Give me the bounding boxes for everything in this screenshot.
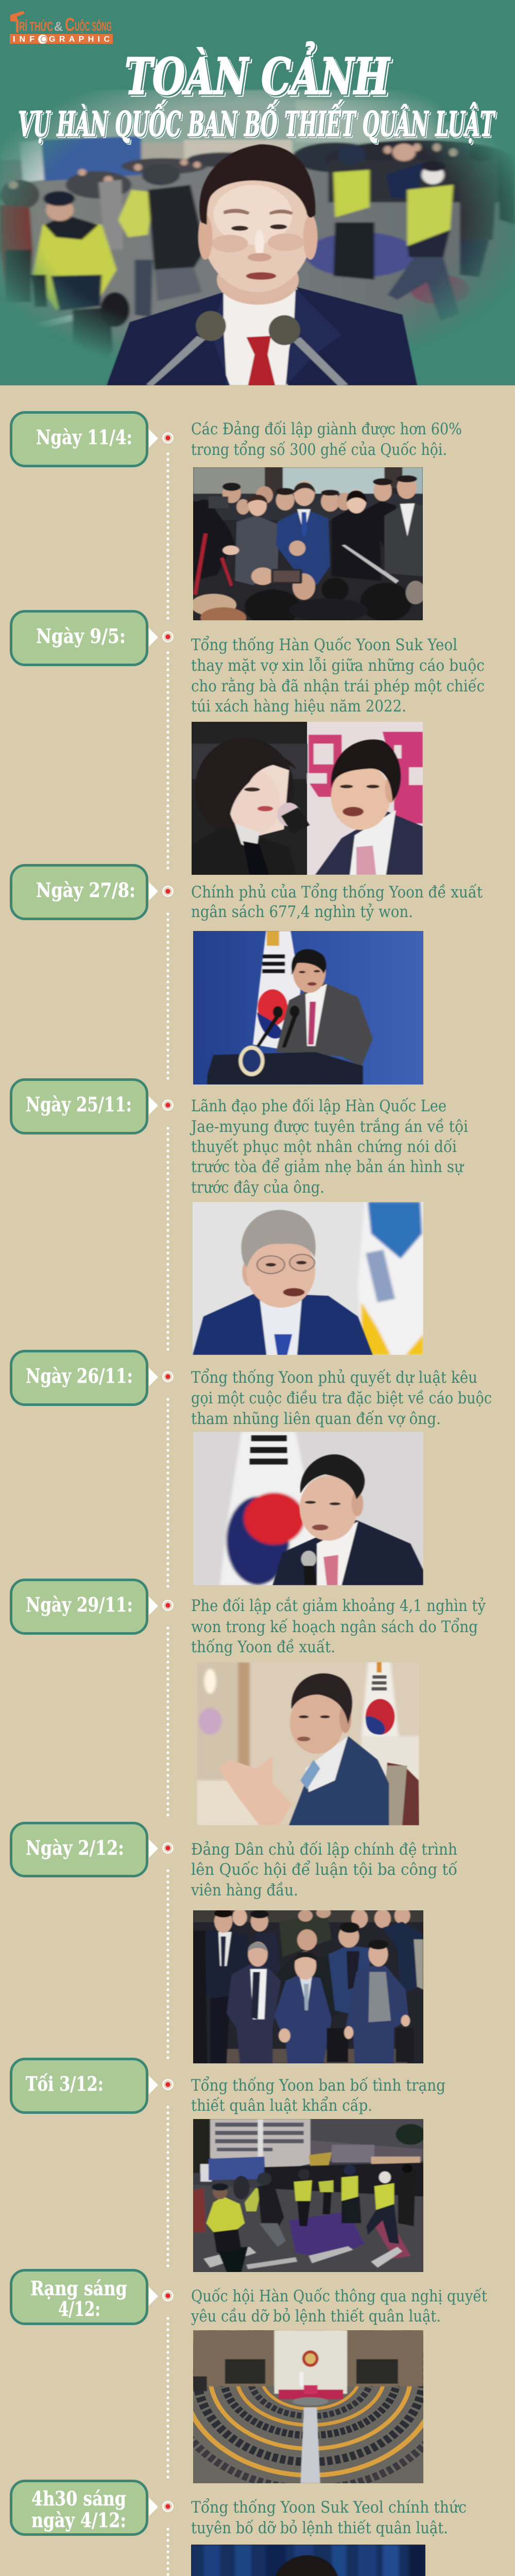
hero photo: street crowd and president: [0, 89, 515, 385]
text: Chính phủ của Tổng thống Yoon đề xuất: [191, 883, 483, 902]
text: tham nhũng liên quan đến vợ ông.: [191, 1410, 441, 1428]
marker: [149, 1096, 173, 1115]
text: Tổng thống Yoon ban bố tình trạng: [191, 2076, 445, 2095]
marker: [149, 2076, 173, 2094]
text: trước tòa để giảm nhẹ bản án hình sự: [191, 1157, 465, 1176]
title: [18, 42, 496, 144]
date pill: Ngày 2/12:: [26, 1836, 124, 1859]
text: thuyết phục một nhân chứng nói dối: [191, 1138, 457, 1156]
text: [191, 2498, 467, 2537]
connector: [166, 1128, 169, 1353]
text: [191, 2287, 487, 2326]
date pill: Rạng sáng: [30, 2277, 127, 2300]
connector: [166, 1628, 169, 1819]
timeline item: Ngày 2/12: [11, 1823, 457, 2063]
date pill: Ngày 29/11:: [26, 1593, 133, 1616]
marker: [149, 2287, 173, 2306]
text: thiết quân luật khẩn cấp.: [191, 2096, 372, 2115]
date pill: [11, 1351, 147, 1404]
marker: [149, 429, 173, 448]
text: thống Yoon đề xuất.: [191, 1638, 335, 1656]
photo: opposition lawmakers press: [193, 467, 423, 620]
date pill: Ngày 27/8:: [36, 878, 135, 902]
timeline item: Ngày 26/11: [11, 1351, 492, 1590]
timeline item: 4h30 sáng ngày 4/12: [11, 2481, 467, 2576]
date pill: 4/12:: [58, 2297, 100, 2320]
marker: [149, 1839, 173, 1858]
text: [191, 1368, 492, 1428]
logo: Tri Thuc & Cuoc Song Infographic: [10, 11, 113, 44]
panel: hero header: [0, 0, 515, 392]
photo: president before flag with mic: [193, 1432, 423, 1585]
marker: [149, 628, 173, 647]
text: ngân sách 677,4 nghìn tỷ won.: [191, 903, 413, 921]
date pill: [11, 866, 147, 919]
timeline item: Rạng sáng 4/12: [11, 2264, 487, 2488]
text: thay mặt vợ xin lỗi giữa những cáo buộc: [191, 656, 485, 675]
text: won trong kế hoạch ngân sách do Tổng: [191, 1617, 478, 1636]
date pill: ngày 4/12:: [31, 2509, 126, 2532]
date pill: [11, 412, 147, 466]
date pill: [11, 1080, 147, 1133]
photo: president gesturing in interview: [197, 1662, 419, 1825]
timeline item: Ngày 9/5: [11, 611, 485, 875]
text: trước đây của ông.: [191, 1178, 324, 1197]
date pill: [11, 2059, 147, 2112]
marker: [149, 1368, 173, 1386]
text: viên hàng đầu.: [191, 1881, 298, 1900]
connector: [166, 2107, 169, 2269]
photo: Lee Jae-myung: [193, 1202, 423, 1355]
text: [191, 2076, 445, 2115]
photo: national assembly chamber: [193, 2330, 423, 2483]
marker: [149, 1597, 173, 1615]
date pill: Tối 3/12:: [26, 2072, 104, 2095]
timeline item: Ngày 11/4: [11, 412, 462, 628]
date pill: [11, 1823, 147, 1876]
logo: Tri Thuc & Cuoc Song Infographic: UỘC SỐNG: [75, 19, 112, 34]
timeline item: Ngày 27/8: [11, 866, 483, 1084]
photo: president announcement before curtain: [191, 2545, 425, 2576]
connector: [166, 454, 169, 622]
connector: [166, 653, 169, 872]
text: Các Đảng đối lập giành được hơn 60%: [191, 420, 462, 438]
title: TOÀN CẢNH: [125, 42, 390, 106]
text: Tổng thống Yoon Suk Yeol chính thức: [191, 2498, 467, 2517]
logo: Tri Thuc & Cuoc Song Infographic: GRAPHIC: [49, 35, 110, 44]
date pill: [11, 2481, 147, 2535]
photo: police and crowd at night: [193, 2119, 423, 2272]
date pill: 4h30 sáng: [31, 2487, 126, 2510]
text: Tổng thống Yoon phủ quyết dự luật kêu: [191, 1368, 477, 1387]
connector: [166, 2529, 169, 2576]
text: [191, 420, 462, 459]
photo: first lady and president: [192, 722, 423, 875]
logo: Tri Thuc & Cuoc Song Infographic: C: [65, 14, 75, 35]
text: Đảng Dân chủ đối lập chính đệ trình: [191, 1840, 457, 1859]
timeline item: Tối 3/12: [11, 2059, 445, 2272]
text: Phe đối lập cắt giảm khoảng 4,1 nghìn tỷ: [191, 1596, 486, 1615]
timeline item: Ngày 25/11: [11, 1080, 468, 1355]
text: Tổng thống Hàn Quốc Yoon Suk Yeol: [191, 635, 457, 654]
connector: [166, 2318, 169, 2481]
logo: Tri Thuc & Cuoc Song Infographic: INF: [13, 35, 35, 44]
timeline item: Ngày 29/11: [11, 1580, 486, 1825]
text: tuyên bố dỡ bỏ lệnh thiết quân luật.: [191, 2519, 448, 2537]
connector: [166, 914, 169, 1082]
photo: Lee and aides walking: [193, 1910, 423, 2063]
photo: president at podium with flag: [193, 931, 423, 1084]
text: [191, 635, 485, 716]
date pill: Ngày 11/4:: [36, 426, 132, 449]
date pill: [11, 1580, 147, 1633]
text: Lãnh đạo phe đối lập Hàn Quốc Lee: [191, 1097, 447, 1115]
text: lên Quốc hội để luận tội ba công tố: [191, 1860, 457, 1879]
marker: [149, 2498, 173, 2516]
marker: [149, 882, 173, 901]
text: túi xách hàng hiệu năm 2022.: [191, 697, 406, 716]
text: [191, 883, 483, 921]
connector: [166, 1399, 169, 1590]
text: [191, 1596, 486, 1656]
text: Jae-myung được tuyên trắng án về tội: [190, 1117, 468, 1136]
text: [190, 1097, 468, 1197]
text: yêu cầu dỡ bỏ lệnh thiết quân luật.: [191, 2307, 441, 2326]
text: cho rằng bà đã nhận trái phép một chiếc: [191, 676, 485, 696]
connector: [166, 1871, 169, 2062]
text: trong tổng số 300 ghế của Quốc hội.: [191, 440, 447, 459]
date pill: [11, 611, 147, 665]
date pill: Ngày 25/11:: [26, 1093, 132, 1116]
text: [191, 1840, 457, 1900]
date pill: Ngày 26/11:: [26, 1364, 133, 1387]
president figure: [107, 144, 417, 386]
logo: Tri Thuc & Cuoc Song Infographic: &: [54, 20, 63, 34]
date pill: [11, 2270, 147, 2324]
date pill: Ngày 9/5:: [36, 624, 126, 648]
logo: Tri Thuc & Cuoc Song Infographic: RÍ THỨC: [19, 19, 53, 34]
